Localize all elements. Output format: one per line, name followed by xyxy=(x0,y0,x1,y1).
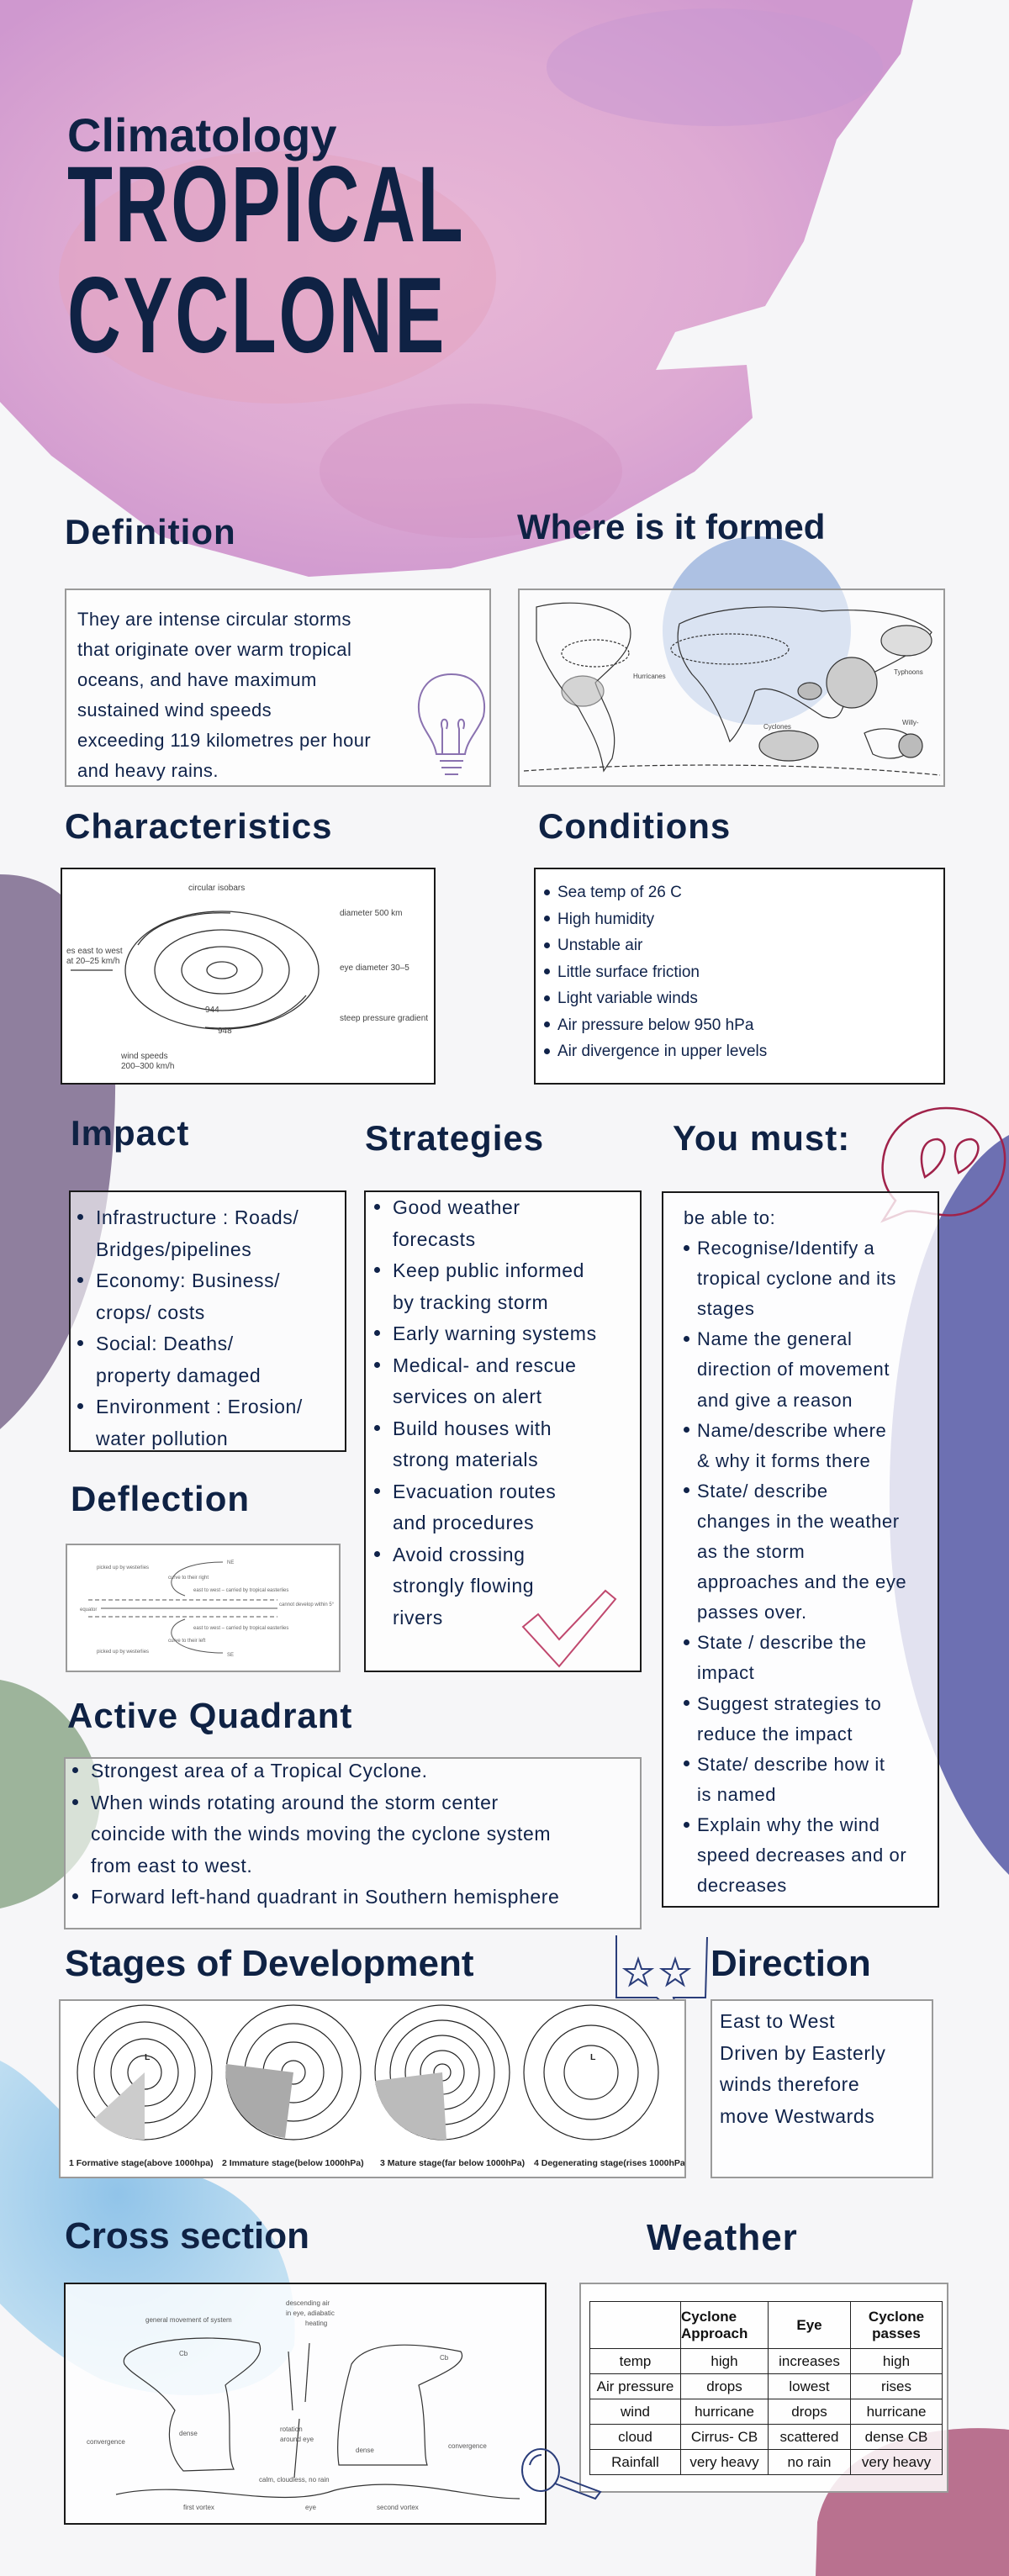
panel: you must: Recognise/Identify a xyxy=(697,1238,874,1259)
heading: Cross section: Cross section xyxy=(65,2215,309,2257)
panel: strategies: and procedures xyxy=(393,1512,534,1533)
panel: deflection diagram: picked up by westerlies xyxy=(97,1565,149,1570)
heading: Strategies: Strategies xyxy=(365,1118,544,1158)
panel: you must: tropical cyclone and its xyxy=(697,1268,896,1289)
panel: world map: Willy- xyxy=(902,719,919,726)
panel: active quadrant: Forward left-hand quadrant in Southern hemisphere xyxy=(91,1886,559,1908)
panel: you must: Name/describe where xyxy=(697,1420,886,1441)
title: TROPICAL CYCLONE: TROPICAL xyxy=(67,145,465,265)
panel: you must: be able to: xyxy=(684,1207,775,1228)
text: direction: move Westwards xyxy=(720,2105,874,2127)
heading: Definition: Definition xyxy=(65,512,236,552)
table: weather changes: very heavy xyxy=(862,2453,931,2470)
panel: you must: State/ describe how it xyxy=(697,1754,885,1775)
table: weather changes: high xyxy=(711,2352,738,2369)
panel: conditions: Air divergence in upper levels xyxy=(557,1043,767,1060)
panel: world map: Typhoons xyxy=(894,668,923,676)
icon: light bulb xyxy=(417,673,486,775)
panel: impact: property damaged xyxy=(96,1364,261,1386)
panel: you must: stages xyxy=(697,1298,754,1319)
table: weather changes: temp xyxy=(620,2352,651,2369)
panel: you must: approaches and the eye xyxy=(697,1571,906,1592)
text: definition: exceeding 119 kilometres per hour xyxy=(77,730,371,751)
panel: impact: Environment : Erosion/ xyxy=(96,1396,303,1417)
panel: deflection diagram: NE xyxy=(227,1560,234,1565)
panel: conditions: Light variable winds xyxy=(557,990,698,1007)
panel: characteristics diagram: es east to west xyxy=(66,947,123,956)
text: definition: oceans, and have maximum xyxy=(77,669,317,690)
panel: characteristics diagram: steep pressure gradient xyxy=(340,1014,428,1023)
panel: cross section diagram xyxy=(64,2283,547,2525)
text: direction xyxy=(720,2010,885,2127)
panel: cross section diagram: dense xyxy=(179,2430,198,2437)
panel: strategies: Build houses with xyxy=(393,1417,552,1439)
panel: cross section diagram: general movement of system xyxy=(145,2316,232,2324)
panel: characteristics diagram: eye diameter 30–5 xyxy=(340,963,409,973)
panel: cross section diagram: in eye, adiabatic xyxy=(286,2309,335,2317)
panel: strategies: services on alert xyxy=(393,1386,542,1407)
panel: world map: Hurricanes xyxy=(633,673,666,680)
table: weather changes: lowest xyxy=(789,2378,830,2394)
panel: characteristics diagram: diameter 500 km xyxy=(340,909,402,918)
panel: characteristics diagram xyxy=(61,868,436,1085)
panel: deflection diagram: curve to their left xyxy=(168,1639,206,1644)
panel: stages diagram: 2 Immature stage(below 1000hPa) xyxy=(222,2158,364,2168)
table: weather changes: Cyclone Approach xyxy=(681,2309,748,2341)
text: definition xyxy=(77,609,371,781)
panel: deflection diagram: equator xyxy=(80,1607,97,1613)
table: weather changes: increases xyxy=(779,2352,840,2369)
panel: strategies xyxy=(364,1190,642,1672)
table: weather changes: Rainfall xyxy=(611,2453,659,2470)
heading: Impact: Impact xyxy=(71,1113,189,1153)
panel: deflection diagram: SE xyxy=(227,1653,234,1658)
panel: you must: speed decreases and or xyxy=(697,1845,906,1866)
panel: characteristics diagram: wind speeds xyxy=(120,1052,168,1061)
panel: cross section diagram: eye xyxy=(305,2504,316,2511)
panel: active quadrant xyxy=(64,1757,642,1929)
panel: you must: State / describe the xyxy=(697,1632,867,1653)
panel: characteristics diagram: circular isobars xyxy=(188,884,245,893)
panel: you must: reduce the impact xyxy=(697,1723,853,1745)
table: weather changes: Air pressure xyxy=(597,2378,674,2394)
panel: strategies: strongly flowing xyxy=(393,1575,534,1597)
table: weather changes: hurricane xyxy=(695,2403,754,2420)
panel: impact: Economy: Business/ xyxy=(96,1270,280,1291)
table: weather changes: high xyxy=(883,2352,910,2369)
panel: strategies: Early warning systems xyxy=(393,1322,597,1344)
table: weather changes: wind xyxy=(621,2403,650,2420)
table: weather changes: Cirrus- CB xyxy=(691,2428,758,2445)
heading: You must: You must: xyxy=(673,1118,850,1158)
panel: world map xyxy=(518,589,945,787)
panel: stages diagram: L xyxy=(590,2052,596,2062)
panel: strategies: strong materials xyxy=(393,1449,538,1470)
text: definition: and heavy rains. xyxy=(77,760,219,781)
panel: you must: Explain why the wind xyxy=(697,1814,880,1835)
panel: world map: Cyclones xyxy=(763,723,791,731)
heading: Stages of Development: Stages of Development xyxy=(65,1943,474,1984)
table: weather changes xyxy=(589,2301,943,2475)
table: weather changes: cloud xyxy=(618,2428,652,2445)
panel: you must: and give a reason xyxy=(697,1390,853,1411)
panel: conditions xyxy=(534,868,945,1085)
panel: cross section diagram: calm, cloudless, no rain xyxy=(259,2476,330,2484)
panel: impact: Bridges/pipelines xyxy=(96,1238,251,1259)
panel: cross section diagram: Cb xyxy=(440,2354,449,2362)
table: weather changes: rises xyxy=(881,2378,911,2394)
icon: check mark xyxy=(521,1589,617,1668)
panel: you must: Name the general xyxy=(697,1328,852,1349)
panel: active quadrant: coincide with the winds moving the cyclone system xyxy=(91,1823,551,1845)
text: definition: that originate over warm tropical xyxy=(77,639,351,660)
panel: impact: Infrastructure : Roads/ xyxy=(96,1206,298,1228)
heading: Where is it formed: Where is it formed xyxy=(517,507,825,546)
text: definition: They are intense circular storms xyxy=(77,609,351,630)
panel: you must: as the storm xyxy=(697,1541,805,1562)
panel: weather table xyxy=(579,2283,948,2493)
panel: conditions: Unstable air xyxy=(557,937,642,954)
panel: cross section diagram: rotation xyxy=(280,2426,303,2433)
table: weather changes: Eye xyxy=(796,2317,822,2332)
panel: you must: impact xyxy=(697,1662,754,1683)
panel: strategies: Evacuation routes xyxy=(393,1480,556,1502)
panel: cross section diagram: dense xyxy=(356,2447,374,2454)
heading: Deflection: Deflection xyxy=(71,1479,250,1518)
panel: definition xyxy=(65,589,491,787)
table: weather changes: drops xyxy=(791,2403,827,2420)
panel: cross section diagram: descending air xyxy=(286,2299,330,2307)
panel: conditions: Little surface friction xyxy=(557,963,700,980)
panel: you must: decreases xyxy=(697,1875,787,1896)
heading: Direction: Direction xyxy=(711,1943,871,1984)
panel: stages diagram xyxy=(59,1999,686,2178)
panel: stages diagram: 3 Mature stage(far below 1000hPa) xyxy=(380,2158,525,2168)
panel: you must: passes over. xyxy=(697,1602,807,1623)
icon: stars speech bubble xyxy=(615,1935,708,1999)
panel: deflection diagram: cannot develop within 5° xyxy=(279,1602,335,1607)
panel: cross section diagram: first vortex xyxy=(183,2504,214,2511)
heading: Active Quadrant: Active Quadrant xyxy=(67,1696,352,1735)
panel: cross section diagram: heating xyxy=(305,2320,327,2327)
panel: active quadrant: When winds rotating around the storm center xyxy=(91,1791,499,1813)
table: weather changes: no rain xyxy=(787,2453,831,2470)
panel: stages diagram: 1 Formative stage(above 1000hpa) xyxy=(69,2158,214,2168)
panel: strategies: Good weather xyxy=(393,1196,520,1218)
table: weather changes: Cyclone passes xyxy=(869,2309,924,2341)
panel: impact: water pollution xyxy=(96,1428,228,1449)
panel: deflection diagram: picked up by westerlies xyxy=(97,1650,149,1655)
panel: conditions: Air pressure below 950 hPa xyxy=(557,1016,753,1034)
panel: you must: State/ describe xyxy=(697,1481,828,1502)
table: weather changes: drops xyxy=(706,2378,742,2394)
heading: Conditions: Conditions xyxy=(538,806,731,846)
panel: deflection diagram xyxy=(66,1544,341,1672)
panel: characteristics diagram: 944 xyxy=(205,1006,219,1015)
panel: direction xyxy=(711,1999,933,2178)
panel: strategies: Avoid crossing xyxy=(393,1544,526,1565)
panel: you must: Suggest strategies to xyxy=(697,1693,881,1713)
panel: strategies: forecasts xyxy=(393,1227,476,1249)
panel: deflection diagram: east to west – carried by tropical easterlies xyxy=(193,1626,288,1631)
text: direction: Driven by Easterly xyxy=(720,2041,885,2063)
panel: cross section diagram: around eye xyxy=(280,2436,314,2443)
panel: deflection diagram: curve to their right xyxy=(168,1576,209,1581)
table: weather changes: scattered xyxy=(780,2428,838,2445)
heading: Weather: Weather xyxy=(647,2217,798,2258)
panel: impact: Social: Deaths/ xyxy=(96,1333,234,1354)
panel: you must: & why it forms there xyxy=(697,1450,870,1471)
table: weather changes: very heavy xyxy=(689,2453,759,2470)
panel: you must xyxy=(662,1191,939,1908)
panel: cross section diagram: Cb xyxy=(179,2350,188,2357)
panel: active quadrant: Strongest area of a Tropical Cyclone. xyxy=(91,1760,428,1782)
panel: strategies: by tracking storm xyxy=(393,1291,548,1313)
table: weather changes: hurricane xyxy=(867,2403,926,2420)
panel: you must: is named xyxy=(697,1784,776,1805)
panel: deflection diagram: east to west – carried by tropical easterlies xyxy=(193,1588,288,1593)
panel: characteristics diagram: 200–300 km/h xyxy=(121,1062,174,1071)
panel: strategies: rivers xyxy=(393,1606,443,1628)
panel: strategies: Medical- and rescue xyxy=(393,1354,577,1375)
panel: conditions: Sea temp of 26 C xyxy=(557,884,682,901)
heading: Characteristics: Characteristics xyxy=(65,806,333,846)
icon: magnifier xyxy=(521,2448,602,2500)
panel: cross section diagram: second vortex xyxy=(377,2504,419,2511)
text: direction: winds therefore xyxy=(720,2073,859,2095)
panel: impact xyxy=(69,1190,346,1452)
text: direction: East to West xyxy=(720,2010,835,2032)
panel: active quadrant: from east to west. xyxy=(91,1855,252,1877)
title: TROPICAL CYCLONE: CYCLONE xyxy=(67,256,446,376)
panel: strategies: Keep public informed xyxy=(393,1259,584,1281)
panel: cross section diagram: convergence xyxy=(448,2442,487,2450)
text: definition: sustained wind speeds xyxy=(77,699,272,721)
icon: quote bubble xyxy=(880,1106,1006,1222)
panel: cross section diagram: convergence xyxy=(87,2438,125,2446)
title: TROPICAL CYCLONE xyxy=(67,145,465,376)
panel: impact: crops/ costs xyxy=(96,1301,205,1323)
title: Climatology: Climatology xyxy=(67,108,336,161)
panel: you must: changes in the weather xyxy=(697,1511,900,1532)
panel: stages diagram: L xyxy=(145,2052,151,2062)
panel: characteristics diagram: at 20–25 km/h xyxy=(66,957,119,966)
panel: stages diagram: 4 Degenerating stage(rises 1000hPa) xyxy=(534,2158,684,2168)
panel: characteristics diagram: 948 xyxy=(218,1027,232,1036)
table: weather changes: dense CB xyxy=(865,2428,927,2445)
panel: conditions: High humidity xyxy=(557,910,654,928)
panel: you must: direction of movement xyxy=(697,1359,890,1380)
